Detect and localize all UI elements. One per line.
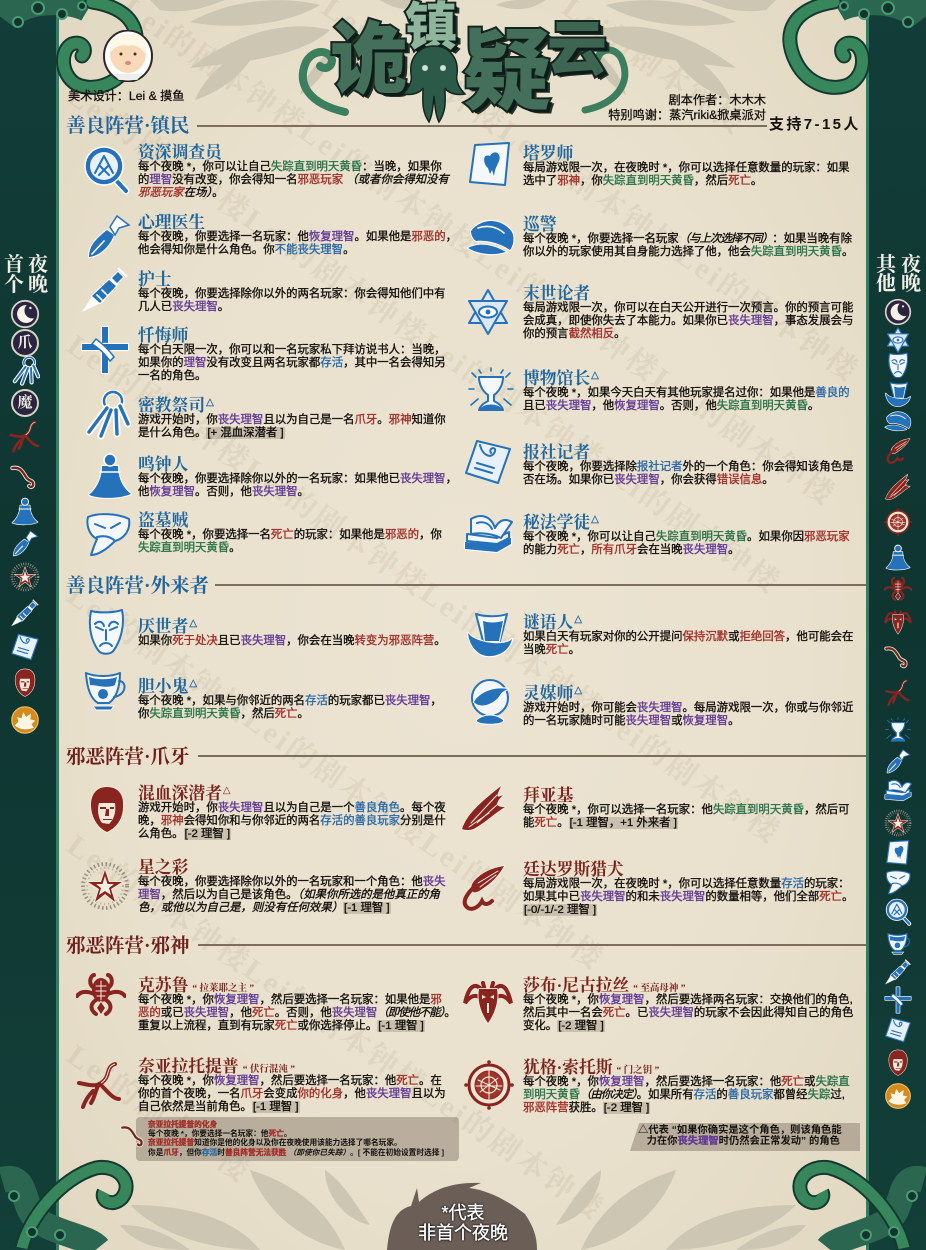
ability — [523, 702, 853, 728]
icon: books — [463, 510, 513, 560]
icon: colour star — [10, 562, 40, 592]
ability — [138, 414, 446, 440]
title logo: 诡 — [330, 15, 408, 103]
heading: other nights: 夜 — [901, 254, 921, 276]
role: 塔罗师 — [465, 141, 860, 203]
icon: star — [80, 861, 130, 911]
ability: 会成真，即使你失去了本能力。如果你已丧失理智，事态发展会与 — [523, 315, 853, 327]
role: 廷达罗斯猎犬 — [465, 857, 860, 919]
icon: tarot — [886, 840, 910, 865]
ability — [138, 994, 456, 1034]
icon: keys — [12, 356, 40, 386]
name: 廷达罗斯猎犬 — [523, 860, 624, 879]
name: 奈亚拉托提普 “ 伏行混沌 ” — [138, 1057, 295, 1076]
role: 犹格·索托斯 — [465, 1055, 860, 1117]
ability: 每个夜晚 *，你可以让自己失踪直到明天黄昏。如果你因邪恶玩家 — [523, 531, 850, 543]
role: 莎布·尼古拉丝 — [465, 973, 860, 1035]
background watermark: Lei的剧本钟楼Lei的剧本钟楼Lei的剧本钟楼Lei的剧本钟楼 — [61, 329, 787, 851]
ability: 游戏开始时，你可能会丧失理智。每局游戏限一次，你或与你邻近 — [523, 702, 853, 714]
role: 资深调查员 — [80, 140, 458, 202]
icon: reporter — [884, 1016, 914, 1046]
ability: 他会得知你是什么角色。你不能丧失理智。 — [138, 244, 354, 256]
icon: confessor — [884, 986, 914, 1016]
icon: doomsayer — [886, 327, 910, 353]
icon: moon — [884, 298, 912, 326]
role: 星之彩 — [80, 855, 458, 917]
ability — [138, 802, 446, 842]
role: 灵媒师 — [465, 681, 860, 743]
ability: 么角色。[-2 理智 ] — [138, 828, 230, 840]
name: 盗墓贼 — [138, 511, 188, 530]
role: 巡警 — [465, 212, 860, 274]
icon: police — [884, 411, 912, 432]
icon: hound — [458, 863, 508, 913]
name: 厌世者△ — [138, 617, 197, 636]
ability: 邪恶阵营获胜。[-2 理智 ] — [523, 1102, 649, 1114]
art credit: 美术设计：Lei & 摸鱼 — [68, 89, 184, 103]
name: 心理医生 — [138, 213, 205, 232]
ability: 每个夜晚 *，你恢复理智，然后要选择一名玩家：如果他是邪 — [138, 994, 442, 1006]
ability: 理智，然后以为自己是该角色。（如果你所选的是他真正的角 — [138, 889, 440, 901]
ability: 每个夜晚 *，你可以让自己失踪直到明天黄昏：当晚，如果你 — [138, 161, 442, 173]
role: 奈亚拉托提普 — [80, 1054, 458, 1116]
ability: [-0/-1/-2 理智 ] — [524, 904, 596, 916]
icon: magnifier — [81, 145, 131, 195]
icon: teacup — [79, 663, 129, 713]
ability: 每个夜晚 *，你恢复理智，然后要选择一名玩家：他死亡。在 — [138, 1075, 442, 1087]
ability: 每个夜晚 *，你可以选择一名玩家：他失踪直到明天黄昏，然后可 — [523, 804, 850, 816]
ability — [138, 876, 446, 916]
ability — [523, 387, 850, 413]
ability: 每个夜晚 *，如果今天白天有其他玩家提名过你：如果他是善良的 — [523, 387, 850, 399]
ability: 的能力死亡，所有爪牙会在当晚丧失理智。 — [523, 544, 740, 556]
heading: other nights — [876, 254, 921, 295]
ability: 你的首个夜晚，一名爪牙会变成你的化身，他丧失理智且以为 — [138, 1088, 446, 1100]
icon: keys — [81, 390, 131, 440]
ability: 然后其中一名会死亡。已丧失理智的玩家不会因此得知自己的角色 — [523, 1007, 853, 1019]
ability — [138, 231, 457, 257]
name: 混血深潜者△ — [138, 784, 231, 803]
bottom silhouette with asterisk note: 非首个夜晚 — [418, 1223, 508, 1243]
ability: 每个夜晚 *，如果与你邻近的两名存活的玩家都已丧失理智， — [138, 695, 442, 707]
icon: nurse — [884, 958, 914, 988]
ability: 每个夜晚 *，你恢复理智，然后要选择两名玩家：交换他们的角色, — [523, 994, 853, 1006]
icon: reporter — [11, 634, 39, 660]
title logo: 云 — [547, 16, 607, 83]
callout text — [148, 1120, 444, 1157]
callout: avatar of nyarlathotep — [120, 1117, 459, 1161]
ability — [523, 531, 850, 557]
ability: 每个夜晚 *，你恢复理智，然后要选择一名玩家：他死亡或失踪直 — [523, 1076, 850, 1088]
ability: 每个夜晚，你要选择除报社记者外的一个角色：你会得知该角色是 — [523, 461, 853, 473]
section heading: outsiders: 善良阵营·外来者 — [66, 576, 209, 597]
ability — [523, 631, 853, 657]
name: 灵媒师△ — [523, 684, 582, 703]
ability — [523, 162, 850, 188]
icon: byakhee — [459, 783, 509, 833]
role: 忏悔师 — [80, 323, 458, 385]
heading: other nights: 他 — [876, 273, 896, 295]
icon: note paper — [463, 437, 513, 487]
heading: first night: 首 — [4, 254, 24, 276]
heading: other nights: 晚 — [901, 273, 921, 295]
icon: nyarlathotep — [75, 1061, 125, 1111]
role: 末世论者 — [465, 281, 860, 343]
ability — [523, 804, 850, 830]
background watermark: Lei的剧本钟楼 — [61, 1039, 257, 1189]
ability: 否在场。如果你已丧失理智，你会获得错误信息。 — [523, 474, 774, 486]
role: 博物馆长 — [465, 366, 860, 428]
bottom silhouette with asterisk note: *代表 — [441, 1203, 484, 1223]
name: 巡警 — [523, 215, 557, 234]
background watermark: Lei的剧本钟楼Lei的剧本钟楼Lei的剧本钟楼Lei的剧本钟楼 — [116, 0, 842, 513]
name: 莎布·尼古拉丝 “ 至高母神 ” — [523, 976, 686, 995]
bottom silhouette with asterisk note — [387, 1182, 537, 1250]
icon: demon badge — [11, 389, 39, 417]
icon: syringe — [80, 265, 130, 315]
ability: 如果其中已丧失理智的和未丧失理智的数量相等，他们全部死亡。 — [523, 891, 853, 903]
role: 谜语人 — [465, 610, 860, 672]
role: 厌世者 — [80, 614, 458, 676]
ability: 每个夜晚，你要选择除你以外的一名玩家：如果他已丧失理智， — [138, 473, 457, 485]
ability: 选中了邪神，你失踪直到明天黄昏，然后死亡。 — [523, 175, 762, 187]
icon: minion badge — [11, 329, 39, 357]
name: 克苏鲁 “ 拉莱耶之主 ” — [138, 976, 254, 995]
triangle note: 力在你丧失理智时仍然会正常发动” 的角色 — [647, 1136, 840, 1147]
name: 塔罗师 — [523, 144, 573, 163]
icon: mask — [81, 608, 131, 658]
icon: quill — [83, 211, 133, 261]
icon: hybrid — [14, 668, 36, 697]
name: 秘法学徒△ — [523, 513, 599, 532]
icon: goat skull — [463, 975, 513, 1025]
ability: 的一名玩家随时可能丧失理智或恢复理智。 — [523, 715, 740, 727]
ability: 每局游戏限一次，在夜晚时 *，你可以选择任意数量存活的玩家： — [523, 878, 850, 890]
ability: 且已丧失理智，他恢复理智。否则，他失踪直到明天黄昏。 — [523, 400, 819, 412]
ability: 重复以上流程，直到有玩家死亡或你选择停止。[-1 理智 ] — [138, 1020, 424, 1032]
ability — [138, 529, 442, 555]
player count: 支持7-15人 — [769, 116, 861, 133]
icon: head — [82, 785, 132, 835]
ability: 晚，邪神会得知你和与你邻近的两名存活的善良玩家分别是什 — [138, 815, 446, 827]
ability: 邪恶玩家在场）。 — [138, 187, 223, 199]
ability: 每个白天限一次，你可以和一名玩家私下拜访说书人：当晚， — [138, 344, 446, 356]
ability: 游戏开始时，你丧失理智且以为自己是一个善良角色。每个夜 — [138, 802, 446, 814]
name: 鸣钟人 — [138, 455, 188, 474]
title logo: 疑 — [463, 22, 551, 121]
section heading: demons: 邪恶阵营·邪神 — [66, 936, 190, 957]
icon: riddler hat — [885, 382, 911, 407]
ability: 失踪直到明天黄昏。 — [138, 542, 241, 554]
left sidebar: first night order — [4, 254, 48, 734]
title logo — [330, 0, 610, 124]
role: 密教祭司 — [80, 393, 458, 455]
ability — [523, 302, 853, 342]
background watermark: Lei的剧本钟楼Lei的剧本钟楼Lei的剧本钟楼 — [316, 0, 865, 389]
icon: yog-sothoth — [884, 508, 912, 536]
ability: 自己依然是当前角色。[-1 理智 ] — [138, 1101, 298, 1113]
icon: seal — [464, 1060, 514, 1110]
callout text: 奈亚拉托提普的化身 — [148, 1120, 217, 1129]
role: 盗墓贼 — [80, 508, 458, 570]
ability: 每个夜晚，你要选择除你以外的两名玩家：你会得知他们中有 — [138, 288, 446, 300]
icon: byakhee — [885, 474, 910, 500]
section heading: minions: 邪恶阵营·爪牙 — [66, 747, 190, 768]
ability — [138, 695, 442, 721]
role: 胆小鬼 — [80, 674, 458, 736]
background watermark: Lei的剧本钟楼Lei的剧本钟楼Lei的剧本钟楼 — [61, 829, 610, 1227]
ability: 变化。[-2 理智 ] — [523, 1020, 604, 1032]
title logo: 镇 — [405, 0, 457, 57]
ability: 能死亡。[-1 理智，+1 外来者 ] — [523, 817, 677, 829]
heading: first night: 晚 — [28, 274, 48, 296]
icon: goblet — [466, 367, 516, 417]
ability: 到明天黄昏（由你决定）。如果所有存活的善良玩家都曾经失踪过, — [523, 1089, 845, 1101]
ability: 游戏开始时，你丧失理智且以为自己是一名爪牙。邪神知道你 — [138, 414, 446, 426]
icon: misanthrope — [888, 352, 908, 378]
icon: worm — [884, 646, 908, 668]
icon: bell — [12, 498, 38, 526]
icon: nyarlathotep — [9, 420, 40, 453]
name: 谜语人△ — [523, 613, 582, 632]
icon: apprentice book — [884, 780, 912, 802]
background watermark: Lei的剧本钟楼Lei的剧本钟楼Lei的剧本钟楼 — [61, 579, 610, 977]
ability: 当晚死亡。 — [523, 644, 580, 656]
icon: plague mask — [83, 509, 133, 559]
background watermark: Lei的剧本钟楼Lei的剧本钟楼Lei的剧本钟楼Lei的剧本钟楼 — [61, 79, 787, 601]
icon: bell — [85, 452, 135, 502]
icon: nyarlathotep — [885, 680, 910, 706]
icon: cthulhu — [76, 968, 126, 1018]
ability — [523, 233, 853, 259]
icon: grave robber — [886, 870, 910, 894]
script credits: 剧本作者：木木木 — [668, 93, 766, 107]
icon: colour star — [884, 810, 912, 836]
icon: worm — [120, 1121, 148, 1151]
heading: first night: 个 — [4, 274, 24, 296]
ability: 你以外的玩家使用其自身能力选择了他，他会失踪直到明天黄昏。 — [523, 246, 853, 258]
ability: 你失踪直到明天黄昏，然后死亡。 — [138, 708, 309, 720]
icon: minion badge: 爪 — [17, 335, 32, 351]
icon: moon — [10, 300, 40, 328]
icon: sun — [11, 706, 39, 734]
ability: 你的预言截然相反。 — [523, 328, 626, 340]
icon: police cap — [466, 212, 516, 262]
name: 博物馆长△ — [523, 369, 599, 388]
icon: shub-niggurath — [884, 610, 912, 634]
callout text: 每个夜晚 *，你要选择一名玩家：他死亡。 — [148, 1129, 292, 1138]
ability — [138, 1075, 446, 1115]
ability: 每局游戏限一次，在夜晚时 *，你可以选择任意数量的玩家：如果 — [523, 162, 850, 174]
role: 拜亚基 — [465, 783, 860, 845]
role: 鸣钟人 — [80, 452, 458, 514]
role: 克苏鲁 — [80, 973, 458, 1035]
ability: 色，或他以为自己是，则没有任何效果）[-1 理智 ] — [138, 902, 390, 914]
icon: tarot card — [465, 140, 515, 190]
icon: sun — [884, 1082, 914, 1112]
triangle note: △代表 “如果你确实是这个角色，则该角色能 — [638, 1125, 842, 1136]
icon: bell — [886, 544, 910, 570]
name: 报社记者 — [523, 443, 590, 462]
ability: 每个夜晚，你要选择除你以外的一名玩家和一个角色：他丧失 — [138, 876, 446, 888]
icon: crystal ball — [465, 678, 515, 728]
ability: 一名的角色。 — [138, 370, 206, 382]
right dark green side band — [867, 0, 926, 1250]
role: 护士 — [80, 267, 458, 329]
name: 末世论者 — [523, 284, 590, 303]
ability: 每局游戏限一次，你可以在白天公开进行一次预言。你的预言可能 — [523, 302, 853, 314]
name: 资深调查员 — [138, 143, 222, 162]
name: 忏悔师 — [138, 326, 188, 345]
ability: 几人已丧失理智。 — [138, 301, 229, 313]
ability — [138, 288, 446, 314]
ability — [523, 461, 853, 487]
ability: 如果你死于处决且已丧失理智，你会在当晚转变为邪恶阵营。 — [138, 635, 446, 647]
icon: investigator — [884, 898, 914, 928]
ability — [138, 473, 457, 499]
left dark green side band — [0, 0, 56, 1250]
name: 胆小鬼△ — [138, 677, 197, 696]
ability: 的理智没有改变，你会得知一名邪恶玩家 （或者你会得知没有 — [138, 174, 449, 186]
icon: psychologist — [886, 749, 910, 774]
icon symbol definitions — [0, 0, 4, 4]
role: 心理医生 — [80, 210, 458, 272]
role: 秘法学徒 — [465, 510, 860, 572]
ability — [523, 1076, 850, 1116]
icon: curator — [885, 717, 911, 742]
icon: nurse — [11, 599, 39, 626]
heading: other nights: 其 — [876, 254, 896, 276]
icon: hound — [886, 438, 910, 464]
script credits: 特别鸣谢：蒸汽riki&掀桌派对 — [608, 108, 766, 122]
section heading: townsfolk: 善良阵营·镇民 — [66, 116, 190, 137]
ability: 每个夜晚 *，你要选择一名死亡的玩家：如果他是邪恶的，你 — [138, 529, 442, 541]
ability: 每个夜晚，你要选择一名玩家：他恢复理智。如果他是邪恶的， — [138, 231, 457, 243]
right sidebar: other nights order — [876, 254, 921, 1109]
heading: first night — [4, 254, 48, 296]
icon: psychologist — [12, 530, 38, 556]
icon: cross — [80, 325, 130, 375]
name: 犹格·索托斯 “ 门之钥 ” — [523, 1058, 659, 1077]
icon: cthulhu — [884, 576, 912, 601]
role: 报社记者 — [465, 440, 860, 502]
role: 混血深潜者 — [80, 781, 458, 843]
icon: top hat — [465, 611, 515, 661]
icon: hexagram eye — [463, 287, 513, 337]
ability — [138, 344, 446, 384]
ability: 如果白天有玩家对你的公开提问保持沉默或拒绝回答，他可能会在 — [523, 631, 853, 643]
icon: avatar worm — [10, 466, 36, 490]
ability — [523, 878, 853, 918]
callout text: 你是爪牙，但你存活时善良阵营无法获胜 （即使你已失踪）。[ 不能在初始设置时选择 ] — [148, 1148, 444, 1157]
name: 星之彩 — [138, 858, 188, 877]
ability: 每个夜晚 *，你要选择一名玩家（与上次选择不同）：如果当晚有除 — [523, 233, 852, 245]
ability: 如果你的理智没有改变且两名玩家都存活，其中一名会得知另 — [138, 357, 446, 369]
ability: 恶的或已丧失理智，他死亡。否则，他丧失理智（即使他不能）。 — [138, 1007, 456, 1019]
ability: 他恢复理智。否则，他丧失理智。 — [138, 486, 309, 498]
icon: cthulhu head — [402, 45, 466, 124]
ability — [138, 161, 449, 201]
avatar of artist — [103, 30, 153, 82]
icon: hybrid — [884, 1049, 914, 1079]
name: 密教祭司△ — [138, 396, 214, 415]
name: 拜亚基 — [523, 786, 573, 805]
script credits — [608, 93, 766, 122]
triangle note — [630, 1123, 860, 1151]
ability — [523, 994, 853, 1034]
name: 护士 — [138, 270, 172, 289]
icon: demon badge: 魔 — [17, 395, 32, 411]
heading: first night: 夜 — [28, 254, 48, 276]
icon: teacup — [884, 928, 914, 958]
ability: 是什么角色。[+ 混血深潜者 ] — [138, 427, 284, 439]
callout text: 奈亚拉托提普知道你是他的化身以及你在夜晚使用该能力选择了哪名玩家。 — [148, 1138, 402, 1147]
